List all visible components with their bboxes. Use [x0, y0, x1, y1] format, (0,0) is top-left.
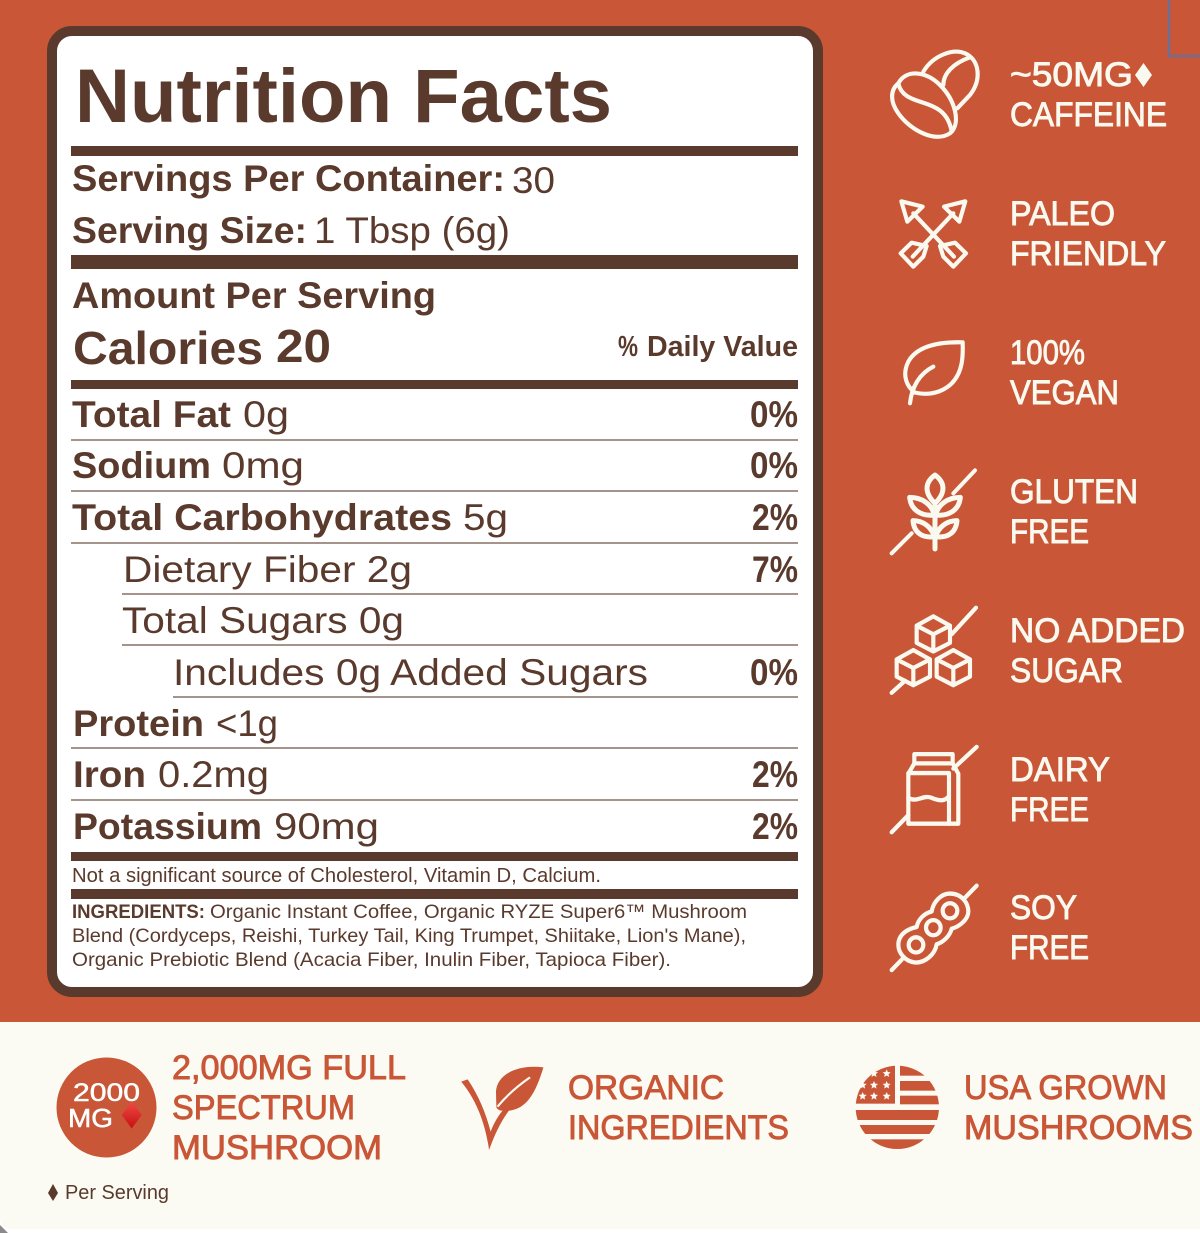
caffeine label: CAFFEINE: [1010, 96, 1167, 134]
gluten label: FREE: [1010, 513, 1089, 551]
row: iron: 2%: [752, 754, 798, 795]
row: sodium: 0%: [750, 445, 798, 486]
row: dietary fiber: 7%: [752, 549, 798, 590]
serving size: Serving Size:: [72, 210, 307, 251]
icon: crossed soy pod: [892, 886, 977, 970]
row: iron: Iron: [73, 754, 146, 795]
vegan label: VEGAN: [1010, 374, 1119, 412]
calories: [73, 320, 331, 374]
usa grown label: [964, 1069, 1193, 1147]
serving size: [72, 210, 510, 251]
icon: crossed arrows: [901, 201, 966, 267]
icon: organic leaf v: [461, 1067, 543, 1150]
row: added sugars: [173, 652, 798, 693]
ingredients: Organic Instant Coffee, Organic RYZE Super6™ Mushroom: [210, 901, 747, 923]
vegan label: [1010, 334, 1119, 412]
daily value heading: Daily Value: [647, 331, 798, 363]
ingredients: Organic Prebiotic Blend (Acacia Fiber, Inulin Fiber, Tapioca Fiber).: [72, 949, 671, 971]
row: total carbohydrates: 5g: [463, 497, 508, 538]
amount per serving: Amount Per Serving: [72, 275, 436, 316]
per serving note: Per Serving: [65, 1182, 169, 1204]
dairy label: DAIRY: [1010, 751, 1110, 789]
row: potassium: 90mg: [274, 806, 379, 847]
paleo label: PALEO: [1010, 195, 1115, 233]
calories: 20: [276, 320, 331, 372]
row: protein: <1g: [216, 703, 278, 744]
row: dietary fiber: Dietary Fiber 2g: [123, 549, 412, 590]
icon: coffee bean: [892, 52, 978, 137]
row: sodium: 0mg: [222, 445, 304, 486]
badge: 2000 mg: 2000: [73, 1079, 140, 1107]
ingredients: Blend (Cordyceps, Reishi, Turkey Tail, King Trumpet, Shiitake, Lion's Mane),: [72, 925, 746, 947]
paleo label: FRIENDLY: [1010, 235, 1166, 273]
badge: 2000 mg: MG: [68, 1103, 113, 1133]
icon: usa flag: [853, 1063, 942, 1150]
serving size: 1 Tbsp (6g): [314, 210, 510, 251]
icon: crossed wheat: [892, 470, 975, 553]
ingredients: INGREDIENTS:: [72, 902, 205, 923]
servings per container: 30: [512, 160, 555, 201]
icon: leaf: [905, 342, 963, 403]
soy label: [1010, 889, 1089, 967]
dairy label: [1010, 751, 1110, 829]
row: protein: Protein: [73, 703, 204, 744]
row: total carbohydrates: 2%: [752, 497, 798, 538]
footnote: Not a significant source of Cholesterol, Vitamin D, Calcium.: [72, 865, 601, 887]
daily value heading: %: [618, 331, 638, 363]
servings per container: Servings Per Container:: [72, 158, 505, 199]
panel: nutrition facts label: [52, 31, 818, 992]
panel: bottom band: [0, 1022, 1200, 1233]
row: iron: [73, 754, 798, 795]
row: potassium: [73, 806, 798, 847]
row: added sugars: 0%: [750, 652, 798, 693]
caffeine label: ~50MG: [1010, 56, 1133, 94]
mushroom label: MUSHROOM: [172, 1129, 382, 1167]
row: total carbohydrates: [72, 497, 798, 538]
mushroom label: SPECTRUM: [172, 1089, 355, 1127]
badge: 2000 mg: [56, 1058, 156, 1158]
row: potassium: Potassium: [73, 806, 262, 847]
usa grown label: USA GROWN: [964, 1069, 1167, 1107]
row: added sugars: Includes 0g Added Sugars: [173, 652, 648, 693]
sugar label: [1010, 612, 1185, 690]
organic label: INGREDIENTS: [568, 1109, 789, 1147]
gluten label: [1010, 473, 1138, 551]
row: total carbohydrates: Total Carbohydrates: [72, 497, 452, 538]
dairy label: FREE: [1010, 791, 1089, 829]
sugar label: SUGAR: [1010, 652, 1123, 690]
row: dietary fiber: [123, 549, 798, 590]
row: total fat: 0%: [750, 394, 798, 435]
organic label: [568, 1069, 789, 1147]
ingredients: [72, 901, 747, 971]
vegan label: 100%: [1010, 334, 1085, 372]
icon: crossed milk carton: [892, 747, 977, 832]
row: total fat: 0g: [243, 394, 289, 435]
gluten label: GLUTEN: [1010, 473, 1138, 511]
usa grown label: MUSHROOMS: [964, 1109, 1193, 1147]
title: Nutrition Facts: [75, 54, 612, 139]
soy label: SOY: [1010, 889, 1077, 927]
organic label: ORGANIC: [568, 1069, 724, 1107]
row: protein: [73, 703, 278, 744]
paleo label: [1010, 195, 1166, 273]
row: total sugars: Total Sugars 0g: [122, 600, 404, 641]
soy label: FREE: [1010, 929, 1089, 967]
row: sodium: [72, 445, 798, 486]
calories: Calories: [73, 322, 263, 374]
icon: crossed sugar cubes: [892, 608, 976, 693]
sugar label: NO ADDED: [1010, 612, 1185, 650]
row: iron: 0.2mg: [158, 754, 269, 795]
row: total fat: [72, 394, 798, 435]
row: potassium: 2%: [752, 806, 798, 847]
mushroom label: 2,000MG FULL: [172, 1049, 406, 1087]
row: total fat: Total Fat: [72, 394, 231, 435]
mushroom label: [172, 1049, 406, 1167]
caffeine label: [1010, 56, 1167, 134]
row: sodium: Sodium: [72, 445, 211, 486]
